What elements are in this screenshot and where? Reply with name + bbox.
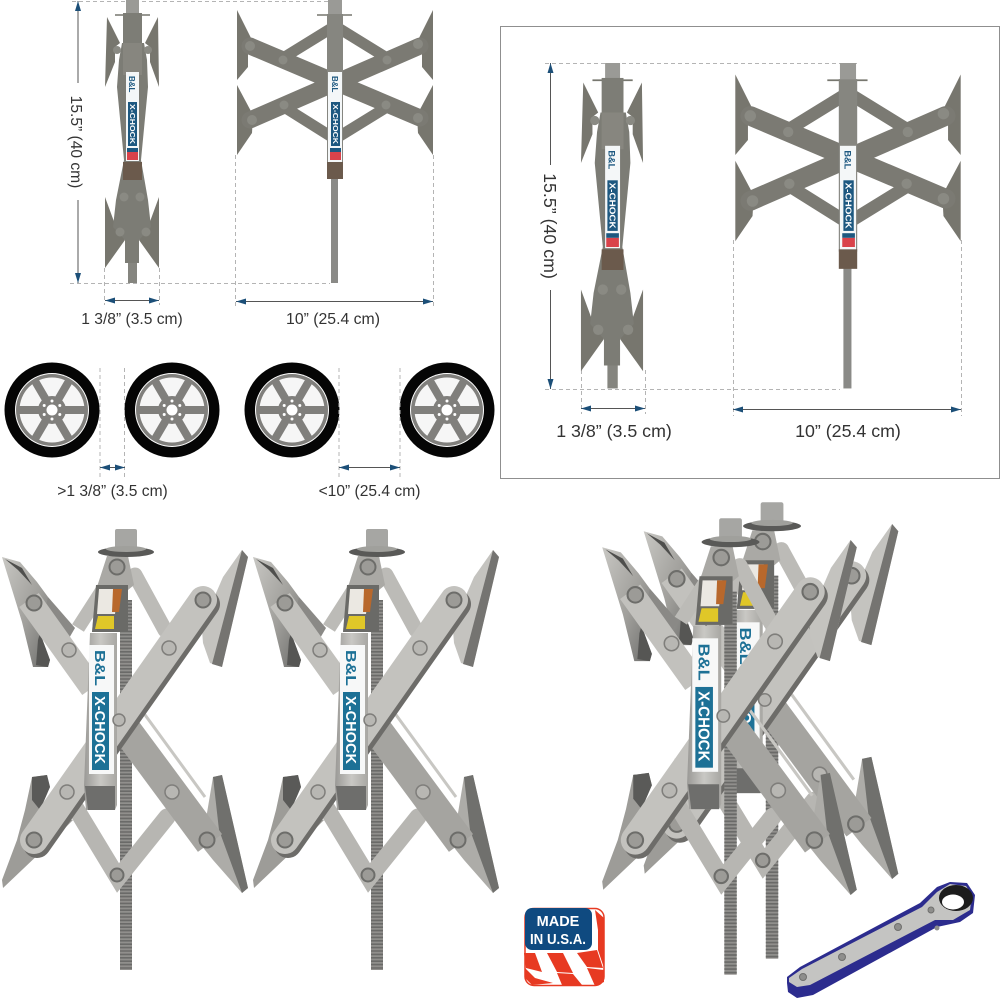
diagram: closed chock: X-CHOCK bbox=[608, 183, 617, 229]
product photo: stacked pair of chocks bbox=[602, 502, 898, 975]
diagram: closed chock bbox=[581, 63, 643, 388]
arrow: wide gap bbox=[339, 466, 400, 468]
product photo: chock middle bbox=[253, 529, 499, 970]
label: panel closed width: 1 3/8” (3.5 cm) bbox=[556, 421, 672, 441]
arrow: narrow gap bbox=[100, 466, 125, 468]
arrow: panel height bbox=[550, 63, 552, 389]
diagram: open chock: X-CHOCK bbox=[844, 183, 853, 229]
panel border bbox=[500, 26, 1000, 478]
diagram: closed chock: B&L bbox=[607, 150, 617, 170]
icon: wheel 1 bbox=[4, 362, 100, 458]
arrow: closed width bbox=[105, 300, 159, 302]
label: closed width: 1 3/8” (3.5 cm) bbox=[81, 311, 183, 328]
label: narrow gap: >1 3/8” (3.5 cm) bbox=[57, 483, 168, 500]
diagram: open chock: B&L bbox=[330, 76, 339, 93]
diagram: open chock: X-CHOCK bbox=[331, 104, 338, 144]
diagram: open chock: B&L bbox=[843, 150, 853, 170]
arrow: height bbox=[77, 1, 79, 283]
icon: ratchet wrench bbox=[787, 882, 975, 998]
front chock bbox=[602, 518, 857, 975]
badge: made in USA: MADE bbox=[537, 914, 580, 930]
badge: made in USA bbox=[524, 908, 604, 986]
diagram: closed chock: B&L bbox=[127, 76, 136, 93]
product photo: chock left bbox=[2, 529, 248, 970]
label: wide gap: <10” (25.4 cm) bbox=[319, 483, 420, 500]
icon: wheel 3 bbox=[244, 362, 340, 458]
panel: top-left dimension diagram bbox=[67, 0, 434, 328]
panel: wheel spacing bbox=[4, 362, 494, 500]
label: panel open width: 10” (25.4 cm) bbox=[795, 421, 901, 441]
label: height: 15.5” (40 cm) bbox=[67, 96, 84, 188]
arrow: open width bbox=[236, 300, 433, 302]
panel: boxed dimension diagram bbox=[500, 26, 1000, 478]
icon: wheel 4 bbox=[400, 362, 494, 458]
rear chock bbox=[644, 502, 898, 959]
diagram: closed chock: X-CHOCK bbox=[128, 104, 135, 144]
diagram: open chock bbox=[735, 63, 961, 388]
label: open width: 10” (25.4 cm) bbox=[286, 311, 380, 328]
arrow: panel closed width bbox=[581, 408, 645, 410]
icon: wheel 2 bbox=[124, 362, 220, 458]
label: panel height: 15.5” (40 cm) bbox=[540, 173, 560, 279]
diagram: open chock bbox=[237, 0, 433, 283]
diagram: closed chock bbox=[105, 0, 159, 283]
arrow: panel open width bbox=[733, 408, 961, 410]
badge: made in USA: IN U.S.A. bbox=[530, 932, 586, 948]
